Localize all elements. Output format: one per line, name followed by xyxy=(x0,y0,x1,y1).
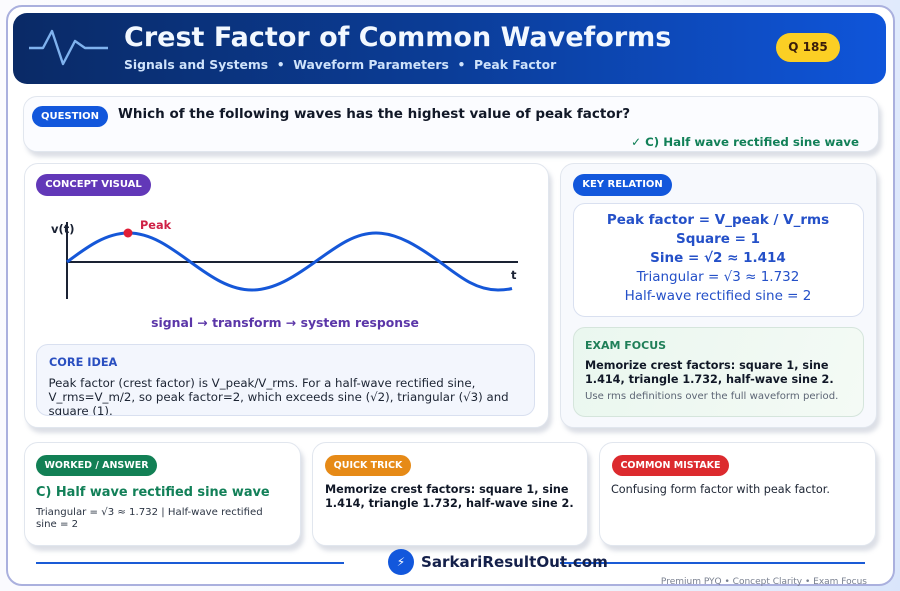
trick label xyxy=(325,455,411,476)
formula lines xyxy=(607,212,829,304)
badge: question number xyxy=(776,33,840,62)
formula lines: Sine = √2 ≈ 1.414 xyxy=(650,250,786,266)
footer tagline: Premium PYQ • Concept Clarity • Exam Focus xyxy=(661,577,867,587)
core idea text: Peak factor (crest factor) is V_peak/V_rms. For a half-wave rectified sine, xyxy=(48,376,475,390)
panel: key relation xyxy=(560,163,877,428)
answer detail: Triangular = √3 ≈ 1.732 | Half-wave rectified xyxy=(36,507,263,518)
wave chart xyxy=(51,219,518,299)
panel: concept visual xyxy=(24,163,549,428)
header banner xyxy=(13,13,886,84)
key relation label xyxy=(573,174,672,196)
exam focus text: 1.414, triangle 1.732, half-wave sine 2. xyxy=(585,373,834,386)
trick text: 1.414, triangle 1.732, half-wave sine 2. xyxy=(325,497,574,510)
exam focus box xyxy=(573,327,864,417)
formula lines: Triangular = √3 ≈ 1.732 xyxy=(637,269,799,285)
answer detail: sine = 2 xyxy=(36,519,78,530)
formula box xyxy=(573,203,864,317)
subtitle: Signals and Systems • Waveform Parameters • Peak Factor xyxy=(124,58,556,72)
flow caption: signal → transform → system response xyxy=(151,315,419,330)
exam focus heading: EXAM FOCUS xyxy=(585,339,666,352)
question text: Which of the following waves has the highest value of peak factor? xyxy=(118,106,630,122)
answer heading: C) Half wave rectified sine wave xyxy=(36,485,270,500)
trick label: QUICK TRICK xyxy=(334,460,402,471)
panel: question xyxy=(23,96,879,152)
answer text: ✓ C) Half wave rectified sine wave xyxy=(631,135,859,149)
formula lines: Peak factor = V_peak / V_rms xyxy=(607,212,829,228)
mistake text: Confusing form factor with peak factor. xyxy=(611,483,830,496)
icon: brand bolt: ⚡ xyxy=(397,555,405,569)
key relation label: KEY RELATION xyxy=(582,179,663,190)
mistake label xyxy=(612,455,729,476)
worked label: WORKED / ANSWER xyxy=(44,460,149,471)
formula lines: Square = 1 xyxy=(676,231,760,247)
peak marker xyxy=(124,228,132,238)
formula lines: Half-wave rectified sine = 2 xyxy=(625,288,811,304)
y axis label: v(t) xyxy=(51,222,75,236)
card: quick trick xyxy=(312,442,588,546)
icon: brand bolt xyxy=(388,549,414,575)
card: common mistake xyxy=(599,442,876,546)
peak label: Peak xyxy=(140,219,172,232)
badge: question number: Q 185 xyxy=(788,40,828,54)
footer left rule xyxy=(36,562,344,564)
exam focus text xyxy=(585,359,834,386)
worked label xyxy=(36,455,157,476)
concept label: CONCEPT VISUAL xyxy=(45,179,142,190)
exam focus note: Use rms definitions over the full waveform period. xyxy=(585,391,838,402)
footer right rule xyxy=(560,562,865,564)
title: Crest Factor of Common Waveforms xyxy=(124,22,671,53)
axes xyxy=(67,222,518,299)
sine curve xyxy=(67,233,512,290)
concept label xyxy=(36,174,151,196)
icon: pulse waveform xyxy=(29,30,108,66)
core idea text: V_rms=V_m/2, so peak factor=2, which exceeds sine (√2), triangular (√3) and xyxy=(48,390,509,404)
question label: QUESTION xyxy=(41,111,99,122)
x axis label: t xyxy=(511,268,517,282)
core idea box xyxy=(36,344,535,416)
exam focus text: Memorize crest factors: square 1, sine xyxy=(585,359,829,372)
trick text: Memorize crest factors: square 1, sine xyxy=(325,483,569,496)
question label xyxy=(32,106,108,127)
trick text xyxy=(325,483,574,510)
core idea text xyxy=(48,376,509,416)
card: worked answer xyxy=(24,442,301,546)
core idea heading: CORE IDEA xyxy=(49,356,117,369)
brand name: SarkariResultOut.com xyxy=(421,553,608,571)
answer detail xyxy=(36,506,263,530)
mistake label: COMMON MISTAKE xyxy=(620,460,721,471)
